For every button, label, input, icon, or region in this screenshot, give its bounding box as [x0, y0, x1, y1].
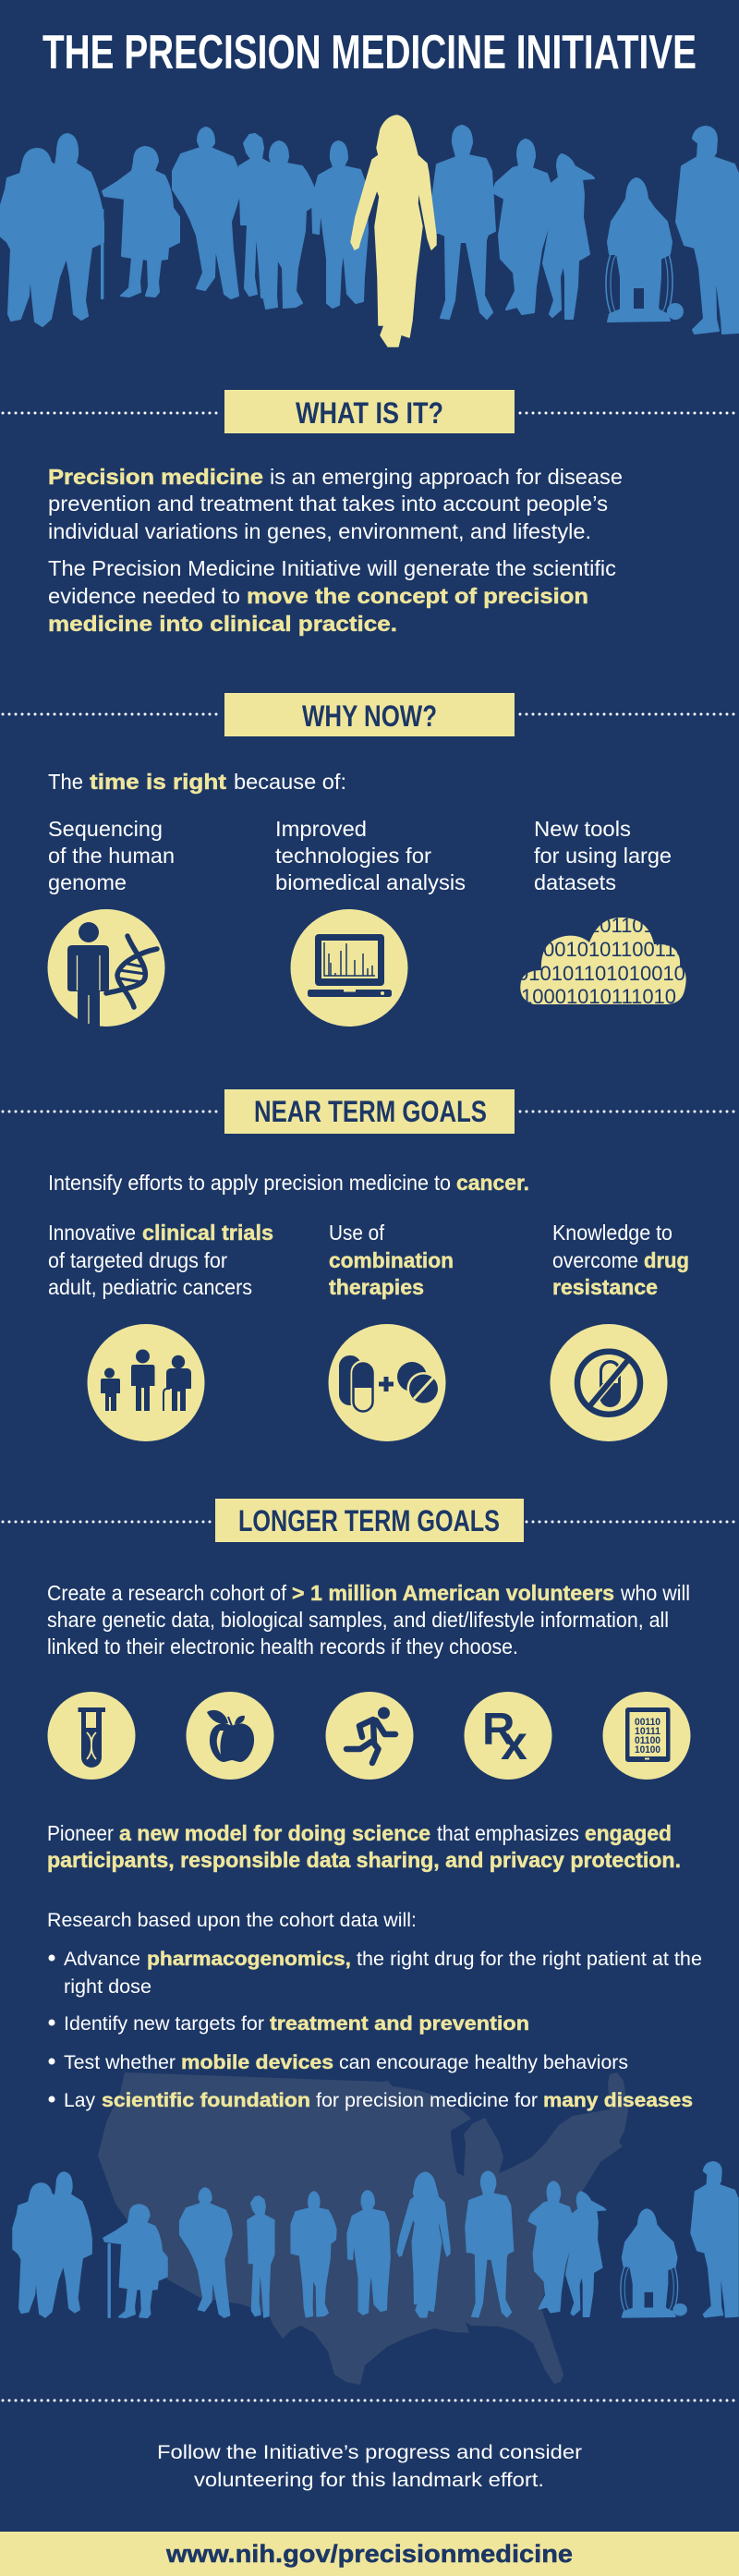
bullet: scientific foundation: for precision medicine for [316, 2090, 538, 2111]
bullet: pharmacogenomics: right dose [64, 1976, 151, 1998]
text block: time is right: because of: [234, 770, 346, 794]
illustration: row of diverse people [13, 2162, 738, 2317]
heading: near term goals [224, 1089, 515, 1134]
text: combination therapies: therapies [329, 1275, 424, 1299]
text block: time is right [48, 770, 346, 794]
text: combination therapies: combination [329, 1248, 454, 1272]
icon: tablet showing binary data: 10100 [635, 1744, 660, 1756]
text: innovative clinical trials [48, 1221, 273, 1299]
bullet: pharmacogenomics: Advance [64, 1949, 140, 1970]
text block: intensify efforts: cancer. [456, 1171, 529, 1195]
text: new tools for large datasets: for using large [534, 844, 672, 868]
text block: pioneer a new model [47, 1821, 681, 1872]
map of the United States [98, 2072, 628, 2385]
icon: tablet showing binary data: 10111 [635, 1726, 660, 1737]
text: innovative clinical trials: Innovative [48, 1221, 136, 1245]
bullet: scientific foundation [48, 2090, 693, 2111]
icon: person with DNA helix [48, 909, 164, 1027]
bullet: scientific foundation: scientific foundation [102, 2090, 310, 2111]
text block: definition of precision medicine: is an emerging approach for disease [270, 465, 623, 489]
icon: tablet showing binary data [602, 1692, 691, 1780]
icon: tablet showing binary data: 00110 [635, 1717, 660, 1728]
text: new tools for large datasets [534, 817, 672, 894]
bullet: pharmacogenomics: pharmacogenomics, [147, 1949, 351, 1970]
text: sequencing of the human genome [48, 817, 175, 894]
closing call to action [157, 2442, 582, 2491]
icon: binary data cloud: 0010101100110 [543, 938, 687, 961]
icon: apple [187, 1692, 273, 1780]
text block: definition of precision medicine [48, 465, 623, 636]
text block: definition of precision medicine: move the concept of precision [247, 584, 588, 608]
text block: research cohort: share genetic data, biological samples, and diet/lifestyle information, all [47, 1608, 669, 1632]
text block: definition of precision medicine: The Precision Medicine Initiative will generate the scientific [48, 556, 616, 580]
text block: pioneer a new model: a new model for doing science [119, 1821, 430, 1845]
text block: definition of precision medicine: Precision medicine [48, 465, 263, 489]
text: combination therapies [329, 1221, 454, 1299]
footer band with URL [0, 2532, 739, 2576]
closing call to action: volunteering for this landmark effort. [194, 2470, 544, 2491]
text: drug resistance [552, 1221, 689, 1299]
heading: longer term goals: LONGER TERM GOALS [238, 1504, 500, 1537]
icon: laptop with chart [290, 909, 408, 1027]
text block: research cohort [47, 1581, 690, 1659]
text block: definition of precision medicine: medicine into clinical practice. [48, 612, 397, 636]
text: improved technologies: Improved [275, 817, 367, 841]
text: drug resistance: Knowledge to [552, 1221, 672, 1245]
bullet: mobile devices: can encourage healthy behaviors [339, 2052, 628, 2073]
text: new tools for large datasets: datasets [534, 870, 616, 894]
text: drug resistance: resistance [552, 1275, 658, 1299]
icon: test tube with DNA [48, 1692, 135, 1780]
bullet: new targets [48, 2013, 529, 2035]
text block: time is right: time is right [90, 770, 226, 794]
text: improved technologies: biomedical analysis [275, 870, 466, 894]
icon: family of patients [87, 1324, 205, 1441]
text block: pioneer a new model: engaged [585, 1821, 672, 1845]
text: improved technologies: technologies for [275, 844, 431, 868]
text block: research based upon cohort data [47, 1910, 702, 2111]
text: innovative clinical trials: adult, pediatric cancers [48, 1275, 252, 1299]
closing call to action: Follow the Initiative’s progress and consider [157, 2442, 582, 2463]
text block: research based upon cohort data: Research based upon the cohort data will: [47, 1910, 417, 1931]
text: sequencing of the human genome: Sequencing [48, 817, 163, 841]
icon: prescription Rx [464, 1692, 552, 1780]
bullet: mobile devices [48, 2052, 628, 2073]
icon: prescription Rx: R [482, 1705, 515, 1755]
bullet: pharmacogenomics [48, 1949, 702, 1998]
illustration: crowd of people with a highlighted woman [0, 115, 739, 346]
text: innovative clinical trials: clinical trials [142, 1221, 273, 1245]
text block: pioneer a new model: participants, responsible data sharing, and privacy protection. [47, 1848, 681, 1872]
text block: pioneer a new model: that emphasizes [437, 1821, 579, 1845]
bullet: new targets: treatment and prevention [270, 2013, 529, 2035]
text block: research cohort: linked to their electronic health records if they choose. [47, 1634, 518, 1659]
bullet: scientific foundation: Lay [64, 2090, 96, 2111]
text: improved technologies [275, 817, 466, 894]
icon: tablet showing binary data: 01100 [635, 1735, 660, 1746]
icon: combination pills and tablets [329, 1324, 445, 1441]
icon: binary data cloud [517, 914, 687, 1008]
text: innovative clinical trials: of targeted drugs for [48, 1248, 227, 1272]
icon: prohibited capsule (drug resistance) [551, 1324, 667, 1441]
bullet: new targets: Identify new targets for [64, 2013, 264, 2035]
text: drug resistance: overcome [552, 1248, 638, 1272]
text block: research cohort: Create a research cohort of [47, 1581, 287, 1605]
text block: research cohort: who will [620, 1581, 690, 1605]
text block: definition of precision medicine: prevention and treatment that takes into account people’s [48, 492, 608, 516]
heading: near term goals: NEAR TERM GOALS [254, 1095, 487, 1128]
icon: binary data cloud: 10001010111010 [521, 985, 676, 1008]
text block: research cohort: > 1 million American volunteers [292, 1581, 614, 1605]
text block: time is right: The [48, 770, 83, 794]
text: combination therapies: Use of [329, 1221, 385, 1245]
heading: why now: WHY NOW? [302, 699, 437, 733]
text: sequencing of the human genome: of the human [48, 844, 175, 868]
text block: definition of precision medicine: evidence needed to [48, 584, 240, 608]
text block: definition of precision medicine: individual variations in genes, environment, and lifestyle. [48, 519, 591, 543]
bullet: pharmacogenomics: the right drug for the right patient at the [357, 1949, 702, 1970]
bullet: mobile devices: Test whether [64, 2052, 176, 2073]
footer band with URL: www.nih.gov/precisionmedicine [165, 2540, 573, 2568]
heading: longer term goals [215, 1499, 524, 1542]
bullet: scientific foundation: many diseases [543, 2090, 693, 2111]
text: drug resistance: drug [644, 1248, 689, 1272]
heading: why now [224, 693, 515, 736]
text: new tools for large datasets: New tools [534, 817, 631, 841]
text block: pioneer a new model: Pioneer [47, 1821, 114, 1845]
text: sequencing of the human genome: genome [48, 870, 127, 894]
icon: binary data cloud: 101101 [588, 914, 655, 937]
icon: binary data cloud: 010101101010010 [517, 962, 685, 985]
icon: prescription Rx: x [501, 1717, 527, 1770]
heading: what is it: WHAT IS IT? [296, 396, 443, 430]
heading: what is it [224, 390, 515, 433]
text block: intensify efforts: Intensify efforts to apply precision medicine to [48, 1171, 451, 1195]
icon: running person [325, 1692, 414, 1780]
bullet: mobile devices: mobile devices [181, 2052, 333, 2073]
